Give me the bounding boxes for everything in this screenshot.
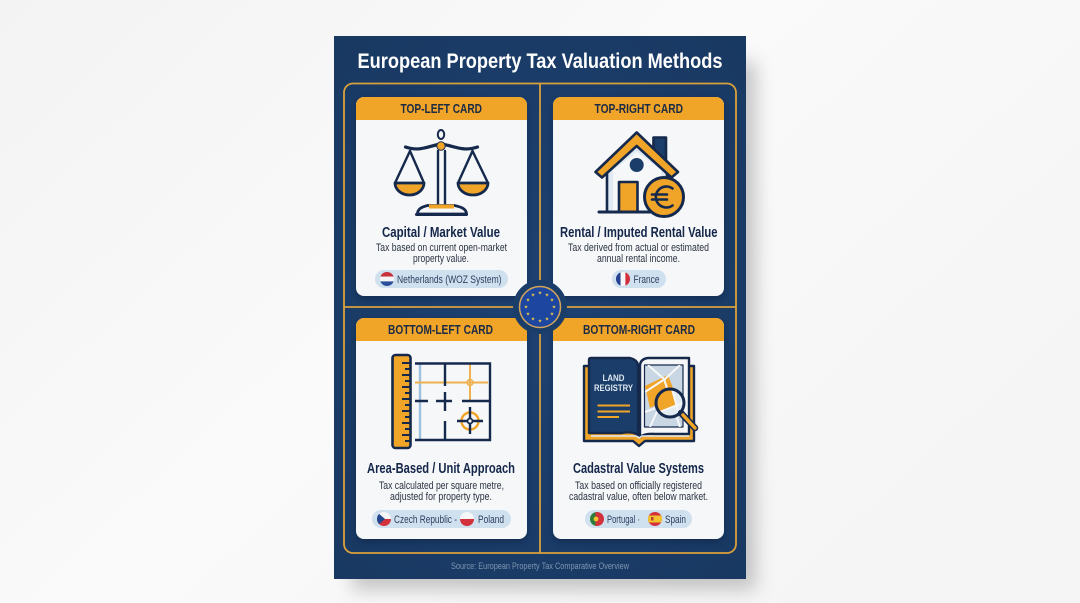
country pill: Netherlands: Netherlands (WOZ System) — [397, 274, 502, 286]
description — [379, 480, 504, 503]
icon: floor plan with ruler — [392, 355, 490, 448]
header label: TOP-LEFT CARD — [400, 101, 482, 116]
center EU badge: ★ — [524, 304, 529, 310]
description — [376, 242, 507, 265]
description: cadastral value, often below market. — [569, 491, 708, 503]
gold quadrant frame — [344, 84, 736, 553]
card: bottom-right, Cadastral Value Systems — [553, 318, 724, 542]
icon: house with euro coin — [596, 132, 684, 216]
center EU badge: ★ — [526, 312, 531, 318]
description: Tax based on officially registered — [575, 480, 702, 492]
source footnote: Source: European Property Tax Comparative Overview — [451, 561, 629, 571]
country pill: Portugal and Spain: Spain — [665, 514, 686, 526]
header label: TOP-RIGHT CARD — [594, 101, 683, 116]
center EU badge — [513, 280, 567, 334]
center EU badge: ★ — [526, 298, 531, 304]
description: Tax based on current open-market — [376, 242, 507, 254]
icon: land registry book with map — [584, 358, 695, 446]
country pill: Portugal and Spain — [585, 510, 692, 528]
description: Tax derived from actual or estimated — [568, 242, 709, 254]
center EU badge: ★ — [531, 292, 536, 298]
icon: balance scale — [395, 130, 488, 214]
card heading: Area-Based / Unit Approach — [367, 461, 515, 477]
description — [569, 480, 708, 503]
book cover label: REGISTRY — [594, 383, 634, 394]
description: adjusted for property type. — [390, 491, 492, 503]
card: top-left, Capital / Market Value — [356, 97, 527, 299]
card heading: Rental / Imputed Rental Value — [560, 225, 718, 241]
country pill: Czech Republic and Poland — [372, 510, 511, 528]
center EU badge: ★ — [538, 318, 543, 324]
description: Tax calculated per square metre, — [379, 480, 504, 492]
center EU badge: ★ — [552, 304, 557, 310]
center EU badge: ★ — [550, 298, 555, 304]
header label: BOTTOM-RIGHT CARD — [583, 322, 695, 337]
country pill: France — [612, 270, 666, 288]
card: bottom-left, Area-Based / Unit Approach — [356, 318, 527, 542]
book cover label — [594, 373, 634, 394]
country pill: Portugal and Spain: Portugal · — [607, 514, 640, 526]
header label: BOTTOM-LEFT CARD — [388, 322, 493, 337]
country pill: Netherlands — [375, 270, 508, 288]
description: annual rental income. — [597, 253, 680, 265]
country pill: Czech Republic and Poland: Czech Republic - — [394, 514, 457, 526]
country pill: France: France — [634, 274, 660, 286]
center EU badge: ★ — [550, 312, 555, 318]
center EU badge: ★ — [538, 290, 543, 296]
title: European Property Tax Valuation Methods — [358, 50, 722, 73]
poster panel — [334, 36, 746, 579]
description: property value. — [413, 253, 469, 265]
country pill: Czech Republic and Poland: Poland — [478, 514, 504, 526]
description — [568, 242, 709, 265]
center EU badge: ★ — [545, 292, 550, 298]
card heading: Capital / Market Value — [382, 225, 500, 241]
center EU badge: ★ — [531, 316, 536, 322]
center EU badge: ★ — [545, 316, 550, 322]
card heading: Cadastral Value Systems — [573, 461, 704, 477]
card: top-right, Rental / Imputed Rental Value — [553, 97, 724, 299]
book cover label: LAND — [602, 373, 625, 384]
